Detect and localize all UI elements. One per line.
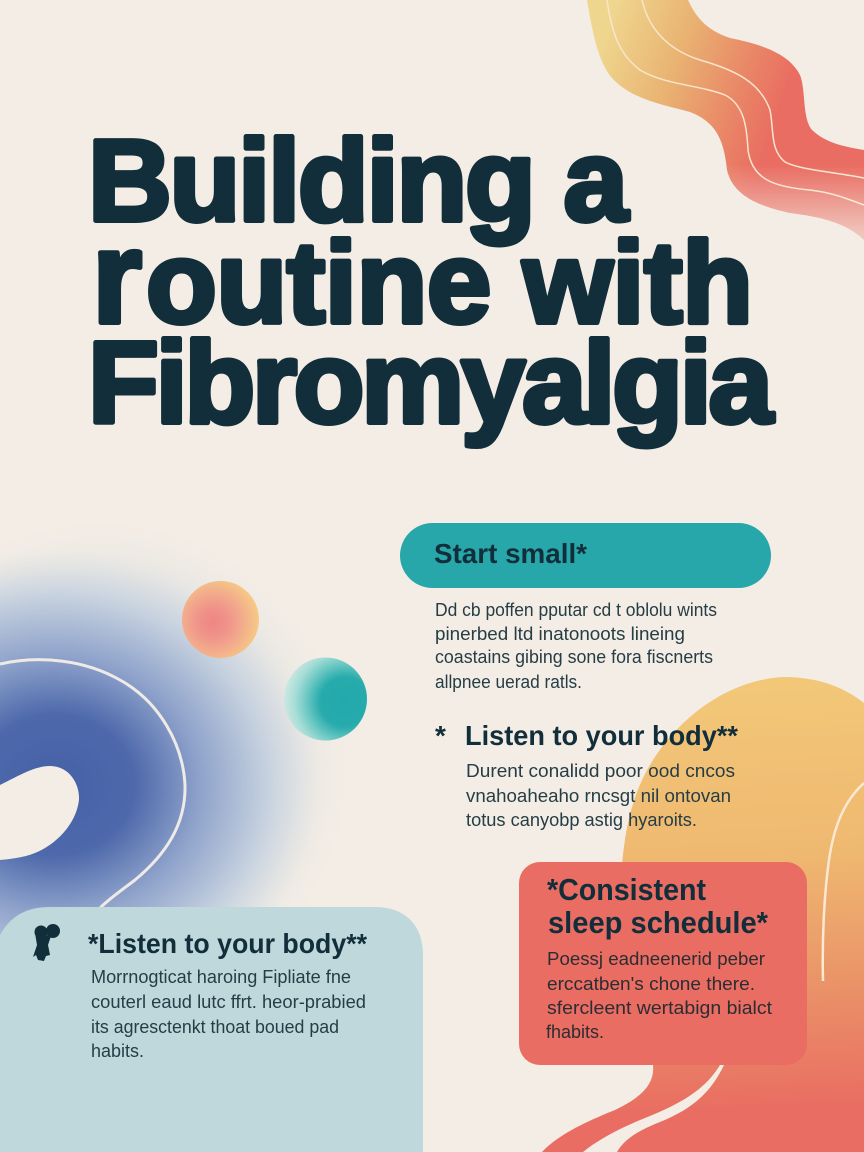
panel: listen to your body (bottom left card) [0, 907, 423, 1152]
panel: consistent sleep schedule [519, 862, 807, 1065]
title [88, 116, 774, 448]
heading: consistent sleep schedule: *Consistent [547, 872, 706, 907]
body text: start small: coastains gibing sone fora fiscnerts [435, 647, 713, 667]
body text: consistent sleep schedule: sfercleent wertabign bialct [547, 998, 772, 1018]
title: r [92, 204, 142, 350]
body text: bottom left card: couterl eaud lutc ffrt. heor-prabied [91, 992, 366, 1012]
body text: listen to your body: vnahoaheaho rncsgt nil ontovan [466, 786, 731, 806]
title: Fibromyalgia [88, 318, 774, 448]
body text: bottom left card: its agresctenkt thoat boued pad [91, 1017, 339, 1037]
top-right wave shape [587, 0, 864, 240]
teal heading pill [400, 523, 771, 588]
body text: consistent sleep schedule: Poessj eadneenerid peber [547, 949, 765, 969]
peach sphere [182, 581, 259, 658]
warm blob lower right [542, 677, 864, 1152]
panel: start small [400, 523, 771, 692]
body text: consistent sleep schedule [546, 949, 772, 1042]
body text: start small: Dd cb poffen pputar cd t oblolu wints [435, 600, 717, 620]
body text: start small: allpnee uerad ratls. [435, 672, 582, 692]
body text: listen to your body: Durent conalidd poor ood cncos [466, 761, 735, 781]
body text: listen to your body: totus canyobp astig hyaroits. [466, 810, 697, 830]
heading: listen to your body: *Listen to your body** [88, 928, 367, 959]
body text: listen to your body [466, 761, 735, 830]
icon: asterisk: * [435, 720, 446, 751]
heading: consistent sleep schedule: sleep schedule* [548, 905, 769, 940]
heading: start small: Start small* [434, 538, 587, 569]
panel: listen to your body (middle) [435, 720, 738, 830]
body text: bottom left card: habits. [91, 1041, 144, 1061]
body text: start small: pinerbed ltd inatonoots lineing [435, 624, 685, 644]
card background [0, 907, 423, 1152]
card background [519, 862, 807, 1065]
teal sphere [284, 658, 367, 740]
icon: dark figure [33, 924, 60, 961]
body text: consistent sleep schedule: fhabits. [546, 1022, 604, 1042]
body text: bottom left card: Morrnogticat haroing Fipliate fne [91, 967, 351, 987]
title: Building a [88, 116, 629, 246]
heading: consistent sleep schedule [547, 872, 769, 940]
body text: start small [435, 600, 717, 692]
body text: bottom left card [91, 967, 366, 1061]
title: outine with [146, 218, 753, 348]
body text: consistent sleep schedule: erccatben's chone there. [547, 974, 755, 994]
blue gradient blob with cut-out and outline [0, 510, 360, 1030]
heading: listen to your body: Listen to your body** [465, 720, 738, 751]
